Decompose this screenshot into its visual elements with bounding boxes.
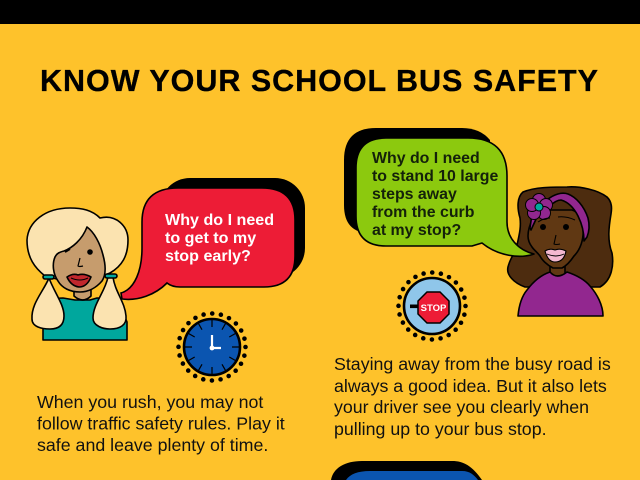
character: girl with headband xyxy=(508,187,613,316)
text: staying away: Staying away from the busy road is xyxy=(334,354,611,374)
icon: stop sign xyxy=(398,272,466,340)
speech bubble: blue xyxy=(331,461,482,480)
icon: stop sign: STOP xyxy=(421,303,447,314)
speech bubble: green xyxy=(344,128,534,256)
speech bubble: green: Why do I need xyxy=(372,150,480,167)
top black band xyxy=(0,0,640,24)
speech bubble: red xyxy=(121,178,305,299)
character: blonde girl xyxy=(27,208,128,340)
speech bubble: red: stop early? xyxy=(165,247,251,265)
text: when you rush: safe and leave plenty of time. xyxy=(37,435,268,455)
speech bubble: red: to get to my xyxy=(165,229,256,247)
speech bubble: green: to stand 10 large xyxy=(372,168,498,185)
text: staying away: your driver see you clearly when xyxy=(334,397,589,417)
speech bubble: green: steps away xyxy=(372,186,457,203)
speech bubble: red: Why do I need xyxy=(165,211,274,229)
text: when you rush: follow traffic safety rules. Play it xyxy=(37,414,285,434)
title: KNOW YOUR SCHOOL BUS SAFETY xyxy=(40,64,598,98)
text: staying away: always a good idea. But it also lets xyxy=(334,376,607,396)
text: staying away: pulling up to your bus stop. xyxy=(334,419,547,439)
speech bubble: green: at my stop? xyxy=(372,222,461,239)
speech bubble: green: from the curb xyxy=(372,204,475,221)
text: when you rush: When you rush, you may not xyxy=(37,392,263,412)
icon: clock xyxy=(178,314,246,380)
